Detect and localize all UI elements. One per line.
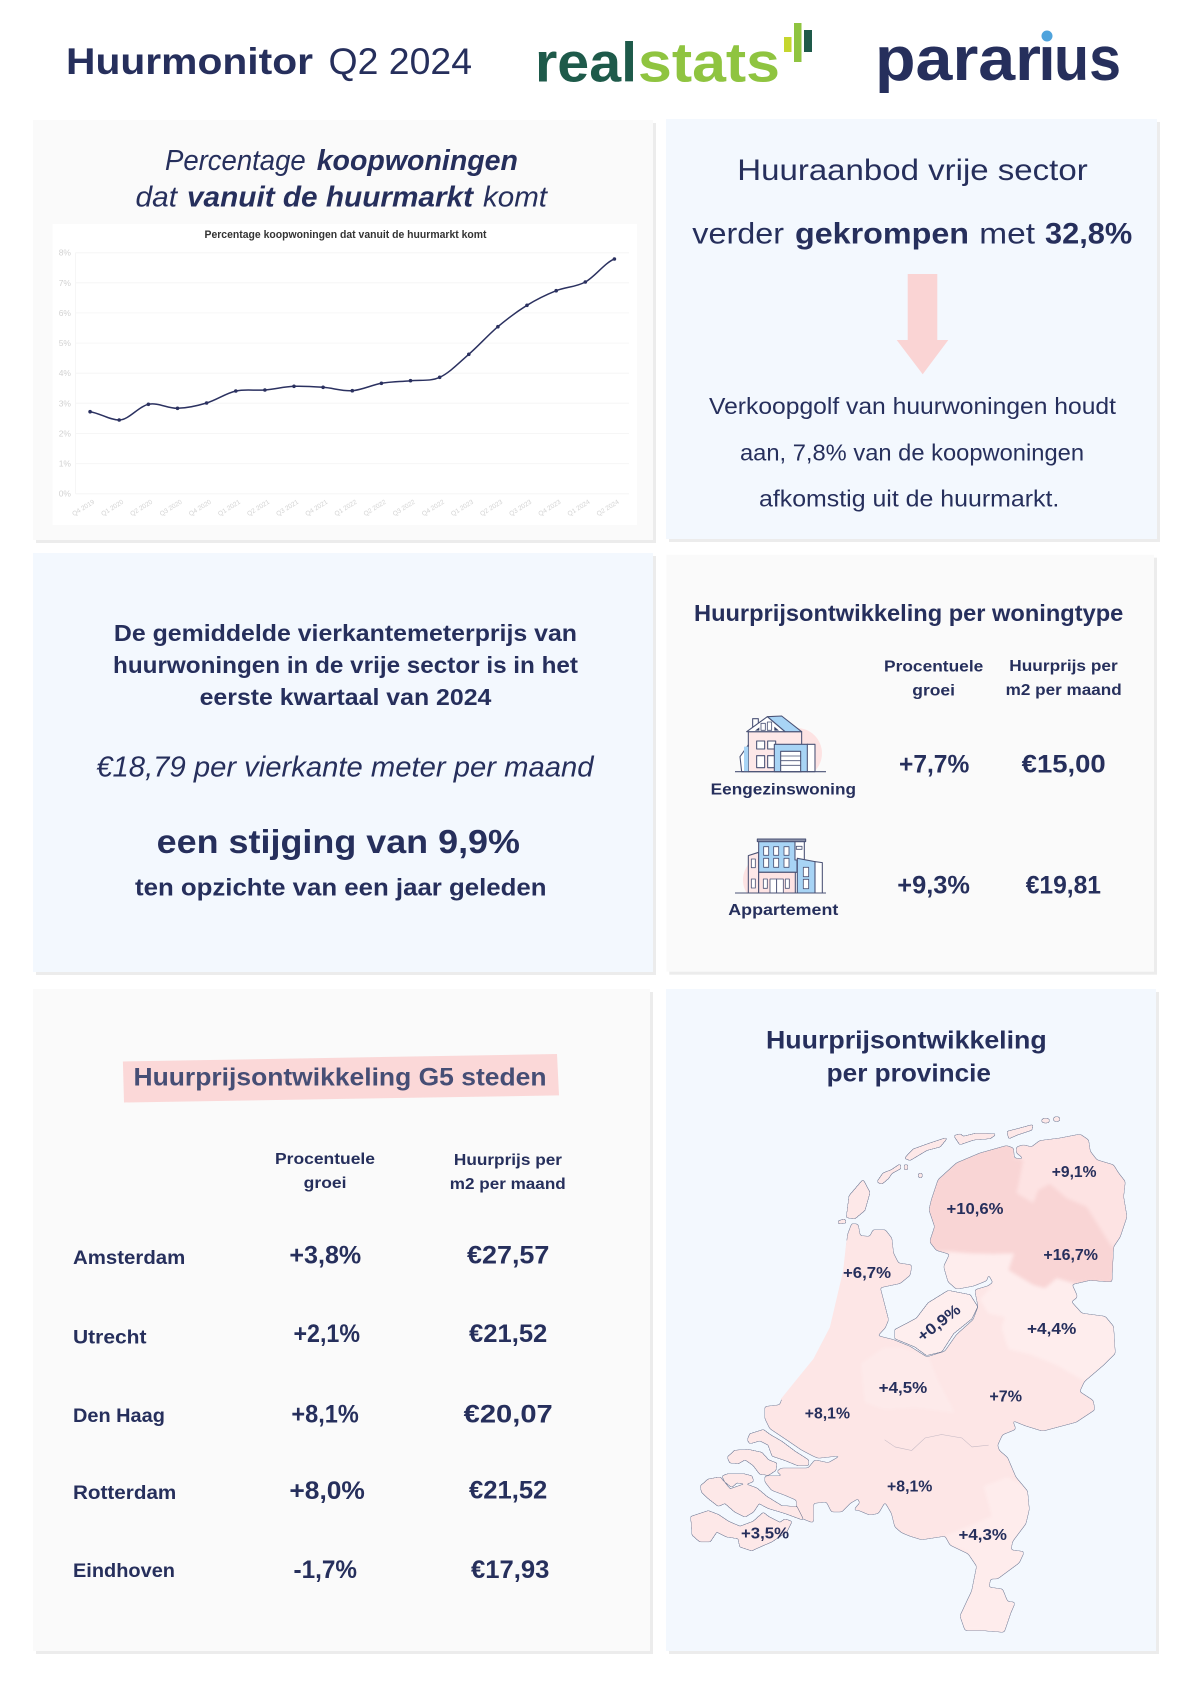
- row: Den Haag: €20,07: [464, 1401, 553, 1429]
- column head: procentuele groei: [884, 659, 983, 700]
- text: gemiddelde vierkantemeterprijs: De gemiddelde vierkantemeterprijs van: [114, 620, 577, 646]
- label: appartement: Appartement: [728, 902, 839, 919]
- map labels: +4,5%: [879, 1380, 928, 1397]
- x axis labels: Q4 2021: [304, 499, 329, 518]
- panel: vierkantemeterprijs: [33, 553, 656, 975]
- y axis labels: 8%: [59, 248, 71, 258]
- map labels: +10,6%: [946, 1201, 1004, 1218]
- value: +7,7%: +7,7%: [899, 751, 969, 779]
- x axis labels: Q4 2019: [71, 499, 96, 518]
- x axis labels: Q4 2020: [188, 499, 213, 518]
- x axis labels: Q3 2021: [275, 499, 300, 518]
- row: Den Haag: +8,1%: [291, 1401, 359, 1429]
- heading: huuraanbod gekrompen: Huuraanbod vrije sector: [737, 154, 1088, 187]
- row: Amsterdam: [73, 1241, 549, 1269]
- column head: huurprijs per m2: m2 per maand: [1006, 682, 1122, 699]
- column head: procentuele groei: [275, 1151, 375, 1192]
- row: Rotterdam: €21,52: [469, 1476, 547, 1504]
- line chart: [53, 224, 637, 525]
- text: verkoopgolf: Verkoopgolf van huurwoningen houdt: [709, 393, 1116, 419]
- header: [66, 23, 1121, 94]
- text: stijging: een stijging van 9,9%: [157, 823, 520, 860]
- row: Utrecht: [73, 1320, 547, 1348]
- row: Amsterdam: +3,8%: [289, 1241, 361, 1269]
- row: Rotterdam: +8,0%: [289, 1477, 365, 1505]
- heading: huuraanbod gekrompen: verder: [692, 217, 784, 250]
- x axis labels: Q4 2023: [537, 499, 563, 518]
- text: verkoopgolf: [709, 393, 1116, 512]
- y axis labels: 0%: [59, 489, 71, 499]
- x axis labels: Q1 2020: [100, 499, 125, 518]
- row: Rotterdam: Rotterdam: [73, 1482, 176, 1504]
- map labels: +4,3%: [958, 1527, 1007, 1544]
- arrow: down: [897, 274, 948, 374]
- coast without outline: [782, 1241, 848, 1400]
- column head: huurprijs per m2: Huurprijs per: [1009, 658, 1118, 675]
- column head: procentuele groei: groei: [304, 1175, 346, 1192]
- map labels: [741, 1164, 1098, 1544]
- logo: pararius: parar: [875, 25, 1041, 94]
- map labels: +7%: [989, 1388, 1022, 1405]
- row: Den Haag: Den Haag: [73, 1405, 165, 1427]
- data line: [88, 257, 616, 422]
- x axis labels: Q3 2023: [508, 499, 533, 518]
- heading: percentage koopwoningen: koopwoningen: [317, 145, 518, 177]
- map labels: +8,1%: [805, 1406, 850, 1422]
- x axis labels: Q2 2020: [129, 499, 154, 518]
- y axis labels: 3%: [59, 398, 71, 408]
- heading: huuraanbod gekrompen: 32,8%: [1045, 217, 1132, 250]
- panel: huuraanbod vrije sector: [666, 119, 1160, 542]
- panel: per woningtype: [666, 555, 1157, 975]
- map labels: +9,1%: [1052, 1164, 1097, 1181]
- row: Rotterdam: [73, 1476, 547, 1505]
- map labels: +0,9%: [914, 1301, 964, 1345]
- y axis labels: 6%: [59, 308, 71, 318]
- column head: procentuele groei: Procentuele: [275, 1151, 375, 1168]
- y axis labels: 5%: [59, 338, 71, 348]
- heading: percentage koopwoningen: vanuit de huurmarkt: [187, 182, 474, 214]
- title: Huurmonitor Q2 2024: Q2 2024: [328, 41, 472, 82]
- logo: realstats: [535, 23, 812, 94]
- text: gemiddelde vierkantemeterprijs: [113, 620, 578, 710]
- y axis labels: [59, 248, 71, 499]
- heading: per woningtype: Huurprijsontwikkeling per woningtype: [694, 600, 1123, 626]
- x axis labels: Q2 2021: [246, 499, 271, 518]
- title: Huurmonitor Q2 2024: [66, 41, 472, 82]
- heading: per provincie: per provincie: [827, 1060, 991, 1088]
- heading: percentage koopwoningen: komt: [483, 182, 549, 214]
- x axis labels: Q2 2023: [479, 499, 504, 518]
- heading: per provincie: [766, 1026, 1047, 1088]
- map labels: +4,4%: [1027, 1321, 1077, 1338]
- map: Netherlands provinces: [691, 1117, 1133, 1637]
- label: eengezinswoning: Eengezinswoning: [711, 781, 856, 798]
- y axis labels: 7%: [59, 278, 71, 288]
- column head: procentuele groei: groei: [912, 682, 955, 700]
- column head: procentuele groei: Procentuele: [884, 659, 983, 676]
- x axis labels: Q2 2022: [363, 499, 388, 518]
- row: Amsterdam: €27,57: [467, 1241, 549, 1269]
- map labels: +8,1%: [887, 1478, 933, 1496]
- text: gemiddelde vierkantemeterprijs: eerste kwartaal van 2024: [200, 684, 492, 710]
- heading: G5 steden with highlight: Huurprijsontwikkeling G5 steden: [134, 1064, 546, 1092]
- heading: huuraanbod gekrompen: gekrompen: [795, 217, 969, 250]
- logo: realstats: real: [535, 31, 637, 94]
- column head: huurprijs per m2: Huurprijs per: [454, 1152, 562, 1169]
- map labels: +3,5%: [741, 1525, 789, 1542]
- y axis labels: 4%: [59, 368, 71, 378]
- y axis labels: 2%: [59, 428, 71, 438]
- logo: pararius: [875, 24, 1121, 94]
- heading: percentage koopwoningen: Percentage: [165, 145, 306, 177]
- text: price per square meter: €18,79 per vierkante meter per maand: [96, 752, 594, 784]
- column head: huurprijs per m2: [450, 1152, 566, 1193]
- row: Eindhoven: €17,93: [471, 1556, 549, 1584]
- logo: pararius: i: [1038, 25, 1056, 94]
- row: Eindhoven: -1,7%: [294, 1556, 357, 1584]
- value: +9,3%: +9,3%: [897, 871, 970, 899]
- panel: G5 steden: [33, 989, 653, 1654]
- text: ten opzichte: ten opzichte van een jaar geleden: [135, 875, 546, 902]
- value: €19,81: €19,81: [1026, 871, 1101, 899]
- column head: huurprijs per m2: m2 per maand: [450, 1176, 566, 1193]
- heading: huuraanbod gekrompen: met: [979, 217, 1036, 250]
- text: verkoopgolf: afkomstig uit de huurmarkt.: [759, 486, 1059, 512]
- row: Amsterdam: Amsterdam: [73, 1247, 185, 1269]
- x axis labels: Q4 2022: [421, 499, 446, 518]
- x axis labels: Q3 2022: [392, 499, 417, 518]
- x axis labels: Q1 2022: [334, 499, 359, 518]
- heading: G5 steden with highlight: [123, 1054, 559, 1102]
- map labels: +16,7%: [1043, 1247, 1098, 1264]
- heading: percentage koopwoningen: dat: [136, 182, 179, 214]
- row: Utrecht: Utrecht: [73, 1326, 147, 1348]
- value: €15,00: €15,00: [1022, 751, 1106, 779]
- y axis labels: 1%: [59, 459, 71, 469]
- logo: pararius: us: [1054, 25, 1121, 94]
- column head: huurprijs per m2: [1006, 658, 1122, 699]
- title: Huurmonitor Q2 2024: Huurmonitor: [66, 41, 313, 82]
- row: Eindhoven: Eindhoven: [73, 1560, 175, 1582]
- text: verkoopgolf: aan, 7,8% van de koopwoningen: [740, 440, 1084, 466]
- heading: huuraanbod gekrompen: [692, 154, 1132, 250]
- x axis labels: Q3 2020: [159, 499, 184, 518]
- logo: realstats: stats: [638, 31, 780, 94]
- row: Utrecht: +2,1%: [294, 1320, 360, 1348]
- x axis labels: Q1 2024: [567, 499, 592, 518]
- panel: per provincie: [666, 989, 1159, 1654]
- text: gemiddelde vierkantemeterprijs: huurwoningen in de vrije sector is in het: [113, 652, 578, 678]
- row: Eindhoven: [73, 1556, 549, 1584]
- icon: appartement: [735, 838, 826, 894]
- x axis labels: Q1 2021: [217, 499, 242, 518]
- icon: eengezinswoning: [735, 716, 826, 779]
- row: Den Haag: [73, 1401, 553, 1429]
- row: Utrecht: €21,52: [469, 1320, 547, 1348]
- map labels: +6,7%: [843, 1265, 891, 1282]
- heading: percentage koopwoningen: [136, 145, 549, 214]
- x axis labels: [71, 499, 621, 518]
- heading: per provincie: Huurprijsontwikkeling: [766, 1026, 1047, 1054]
- x axis labels: Q1 2023: [450, 499, 475, 518]
- chart title: Percentage koopwoningen dat vanuit de huurmarkt komt: [204, 229, 487, 241]
- x axis labels: Q2 2024: [596, 499, 621, 518]
